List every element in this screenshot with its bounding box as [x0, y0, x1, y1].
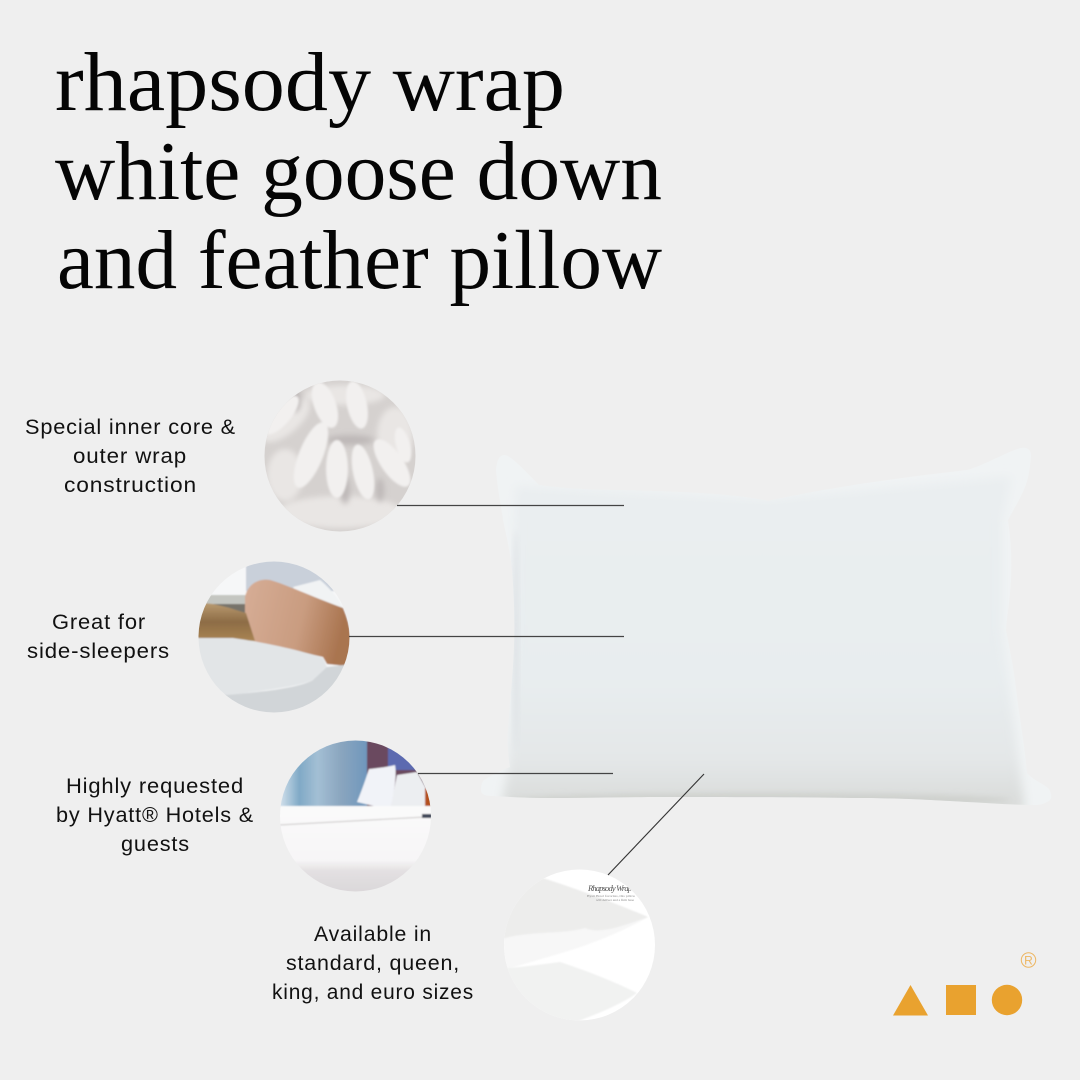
icon: hotel bed photo — [277, 738, 435, 896]
feature: sizes — [272, 869, 656, 1024]
title: rhapsody wrap — [55, 36, 565, 129]
pillow photo — [502, 545, 1024, 804]
logo: triangle square circle: R — [1024, 954, 1033, 968]
label: sizes — [272, 923, 474, 1004]
label: sizes: Available in — [314, 923, 432, 946]
logo: triangle square circle — [893, 953, 1036, 1016]
label: hotels: guests — [121, 833, 190, 856]
small product caption — [587, 885, 635, 901]
title — [55, 36, 662, 307]
label: inner core: construction — [64, 474, 197, 497]
leader lines — [349, 506, 704, 875]
label: hotels — [56, 775, 254, 856]
label: side sleepers: side-sleepers — [27, 640, 170, 663]
label: sizes: standard, queen, — [286, 952, 460, 975]
icon: feathers photo — [253, 379, 417, 532]
icon: side sleeper photo — [196, 559, 352, 716]
label: inner core: Special inner core & — [25, 416, 236, 439]
feature: side sleepers — [27, 559, 352, 716]
small product caption: will deliver and a firm base — [596, 898, 634, 902]
small product caption: Hyatt Hotel favorites, this pillow — [587, 894, 635, 899]
title: white goose down — [55, 125, 662, 218]
label: sizes: king, and euro sizes — [272, 981, 474, 1004]
feature: hotels — [56, 738, 435, 896]
icon: stacked pillows photo — [498, 869, 656, 1024]
feature: inner core and wrap — [25, 379, 417, 532]
label: inner core — [25, 416, 236, 497]
title: and feather pillow — [57, 214, 662, 307]
label: hotels: Highly requested — [66, 775, 244, 798]
label: inner core: outer wrap — [73, 445, 187, 468]
small product caption: Rhapsody Wrap — [587, 883, 632, 893]
label: hotels: by Hyatt® Hotels & — [56, 804, 254, 827]
label: side sleepers: Great for — [52, 611, 146, 634]
label: side sleepers — [27, 611, 170, 663]
